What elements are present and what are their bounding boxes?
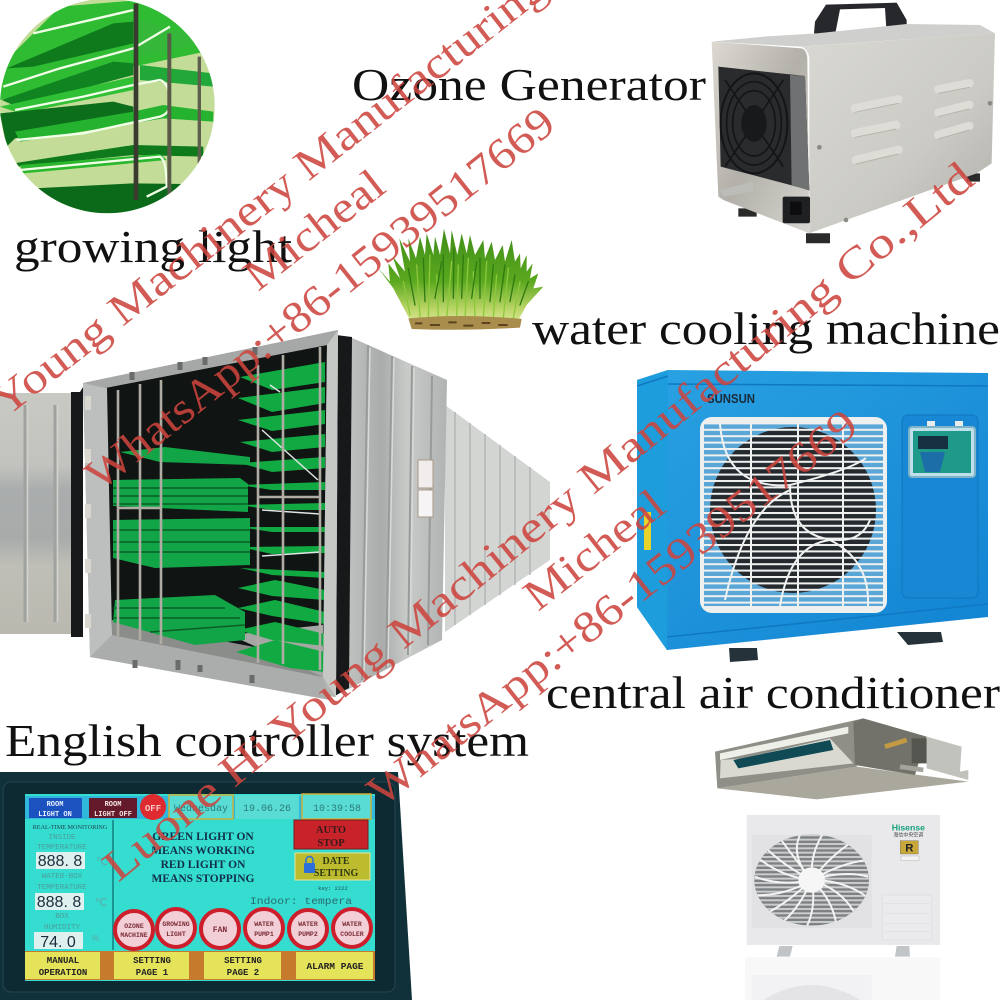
photo: outdoor AC unit — [745, 815, 940, 1000]
top bar: ROOM — [47, 801, 63, 809]
fan hub — [798, 867, 825, 893]
date setting button: DATE — [322, 856, 350, 867]
label: water cooling machine: water cooling machine — [532, 303, 1000, 354]
container side panel — [347, 337, 447, 690]
watermark: contact name upper: Micheal — [234, 160, 394, 300]
status message: GREEN LIGHT ON — [152, 831, 254, 843]
vents — [855, 83, 969, 160]
status message: MEANS STOPPING — [152, 873, 255, 885]
left readouts: INSIDE — [48, 834, 76, 842]
auto stop button: STOP — [317, 838, 345, 849]
frame — [83, 330, 338, 697]
left tray stacks — [113, 447, 250, 645]
watermark: whatsapp upper: WhatsApp:+86-15939517669 — [76, 97, 564, 500]
left readouts: BOX — [55, 913, 69, 921]
status lamps: OZONE — [124, 923, 144, 930]
top face — [712, 24, 995, 47]
photo: ducted indoor unit — [715, 718, 968, 799]
status lamps: GROWING — [162, 921, 190, 928]
control panel — [902, 415, 978, 598]
screen — [25, 794, 375, 981]
certification badge — [900, 841, 918, 854]
fan grille — [700, 417, 887, 613]
right tray stack — [236, 362, 325, 672]
bottom nav buttons: OPERATION — [39, 968, 87, 978]
top bar: LIGHT ON — [38, 811, 72, 819]
underside — [717, 767, 968, 799]
photo: distant container — [445, 405, 550, 632]
top bar: OFF — [145, 804, 161, 814]
top bar: Wednesday — [174, 803, 228, 815]
status message: MEANS WORKING — [151, 845, 255, 857]
bottom nav buttons — [25, 951, 375, 980]
status lamps: WATER — [342, 921, 362, 928]
copper pipe fittings — [885, 740, 907, 747]
front face — [712, 42, 809, 233]
status lamps: MACHINE — [120, 932, 148, 939]
photo: water chiller — [637, 370, 988, 662]
status lamps: WATER — [298, 921, 318, 928]
fan box — [718, 67, 809, 190]
status message: RED LIGHT ON — [161, 859, 246, 871]
status lamps: PUMP1 — [254, 931, 274, 938]
status message — [151, 831, 255, 885]
door posts — [83, 383, 112, 657]
top bar: ROOM — [105, 801, 121, 809]
side panel — [853, 718, 927, 775]
auto stop button — [294, 820, 368, 849]
photo: outdoor AC unit: 海信中央空调 — [893, 831, 923, 838]
left readouts: ℃ — [95, 897, 107, 909]
left readouts: ℃ — [96, 856, 108, 868]
photo: fodder container — [83, 330, 447, 700]
brand: Hisense — [892, 823, 925, 833]
left readouts: REAL-TIME MONITORING — [33, 824, 108, 831]
interior — [105, 345, 327, 677]
bottom nav buttons: ALARM PAGE — [306, 961, 364, 972]
photo: left container door — [0, 387, 83, 637]
bottom nav buttons: PAGE 2 — [227, 968, 259, 978]
photo: outdoor AC unit: R — [905, 843, 913, 855]
label: ozone generator: Ozone Generator — [352, 59, 706, 110]
side face — [802, 33, 995, 233]
left readouts: 888. 8 — [38, 853, 82, 870]
left readouts: HUMIDITY — [44, 924, 80, 932]
status lamps: PUMP2 — [298, 931, 318, 938]
top bar: 19.06.26 — [243, 804, 291, 815]
top bar: LIGHT OFF — [94, 811, 132, 819]
status lamps: COOLER — [340, 931, 364, 938]
date setting button — [295, 853, 370, 880]
top bar — [25, 794, 375, 820]
hinges — [85, 396, 91, 628]
handle — [814, 3, 907, 35]
status lamps: FAN — [213, 926, 227, 935]
feet — [777, 946, 910, 957]
left readouts: 74. 0 — [40, 934, 76, 951]
bottom nav buttons: SETTING — [133, 956, 171, 966]
reflection — [745, 957, 940, 1000]
label: growing light: growing light — [14, 221, 292, 272]
date setting button: SETTING — [314, 868, 358, 879]
photo: growing light — [0, 0, 217, 217]
indoor text: Indoor: tempera — [250, 896, 352, 908]
watermark: whatsapp lower: WhatsApp:+86-15939517669 — [358, 399, 867, 816]
front frame — [715, 718, 863, 788]
door gasket — [333, 335, 352, 697]
top bar: 10:39:58 — [313, 804, 361, 815]
electrical box — [927, 737, 968, 780]
brand: SUNSUN — [707, 391, 755, 406]
gas connector — [720, 182, 753, 197]
status lamps: WATER — [254, 921, 274, 928]
auto stop button: AUTO — [316, 825, 346, 836]
left readouts: 888. 8 — [37, 894, 81, 911]
left readouts: % — [92, 934, 99, 943]
panel: touch-screen controller — [0, 772, 412, 1000]
fan grille — [752, 835, 872, 928]
bottom nav buttons: MANUAL — [47, 956, 79, 966]
label: English controller system: English controller system — [5, 715, 529, 766]
louvre panel — [883, 895, 932, 940]
status lamps: LIGHT — [166, 931, 186, 938]
left readouts: TEMPERATURE — [37, 884, 87, 892]
watermark: company line lower: Luone Hi Young Machinery Manufacturing Co.,Ltd — [93, 152, 983, 891]
bottom nav buttons: PAGE 1 — [136, 968, 169, 978]
bottom nav buttons: SETTING — [224, 956, 262, 966]
key text: key: 2222 — [318, 885, 348, 892]
label: central air conditioner: central air conditioner — [546, 667, 1000, 718]
watermark: contact name lower: Micheal — [514, 480, 674, 620]
status lamps — [115, 909, 371, 949]
left readouts: WATER-BOX — [42, 873, 83, 881]
feet — [738, 173, 980, 243]
soil — [408, 316, 522, 330]
left readouts: TEMPERATURE — [37, 844, 87, 852]
left readouts — [33, 820, 113, 951]
photo: ozone generator — [712, 3, 995, 243]
power socket — [783, 197, 810, 223]
photo: wheatgrass — [378, 229, 543, 330]
rack rods — [118, 347, 320, 670]
